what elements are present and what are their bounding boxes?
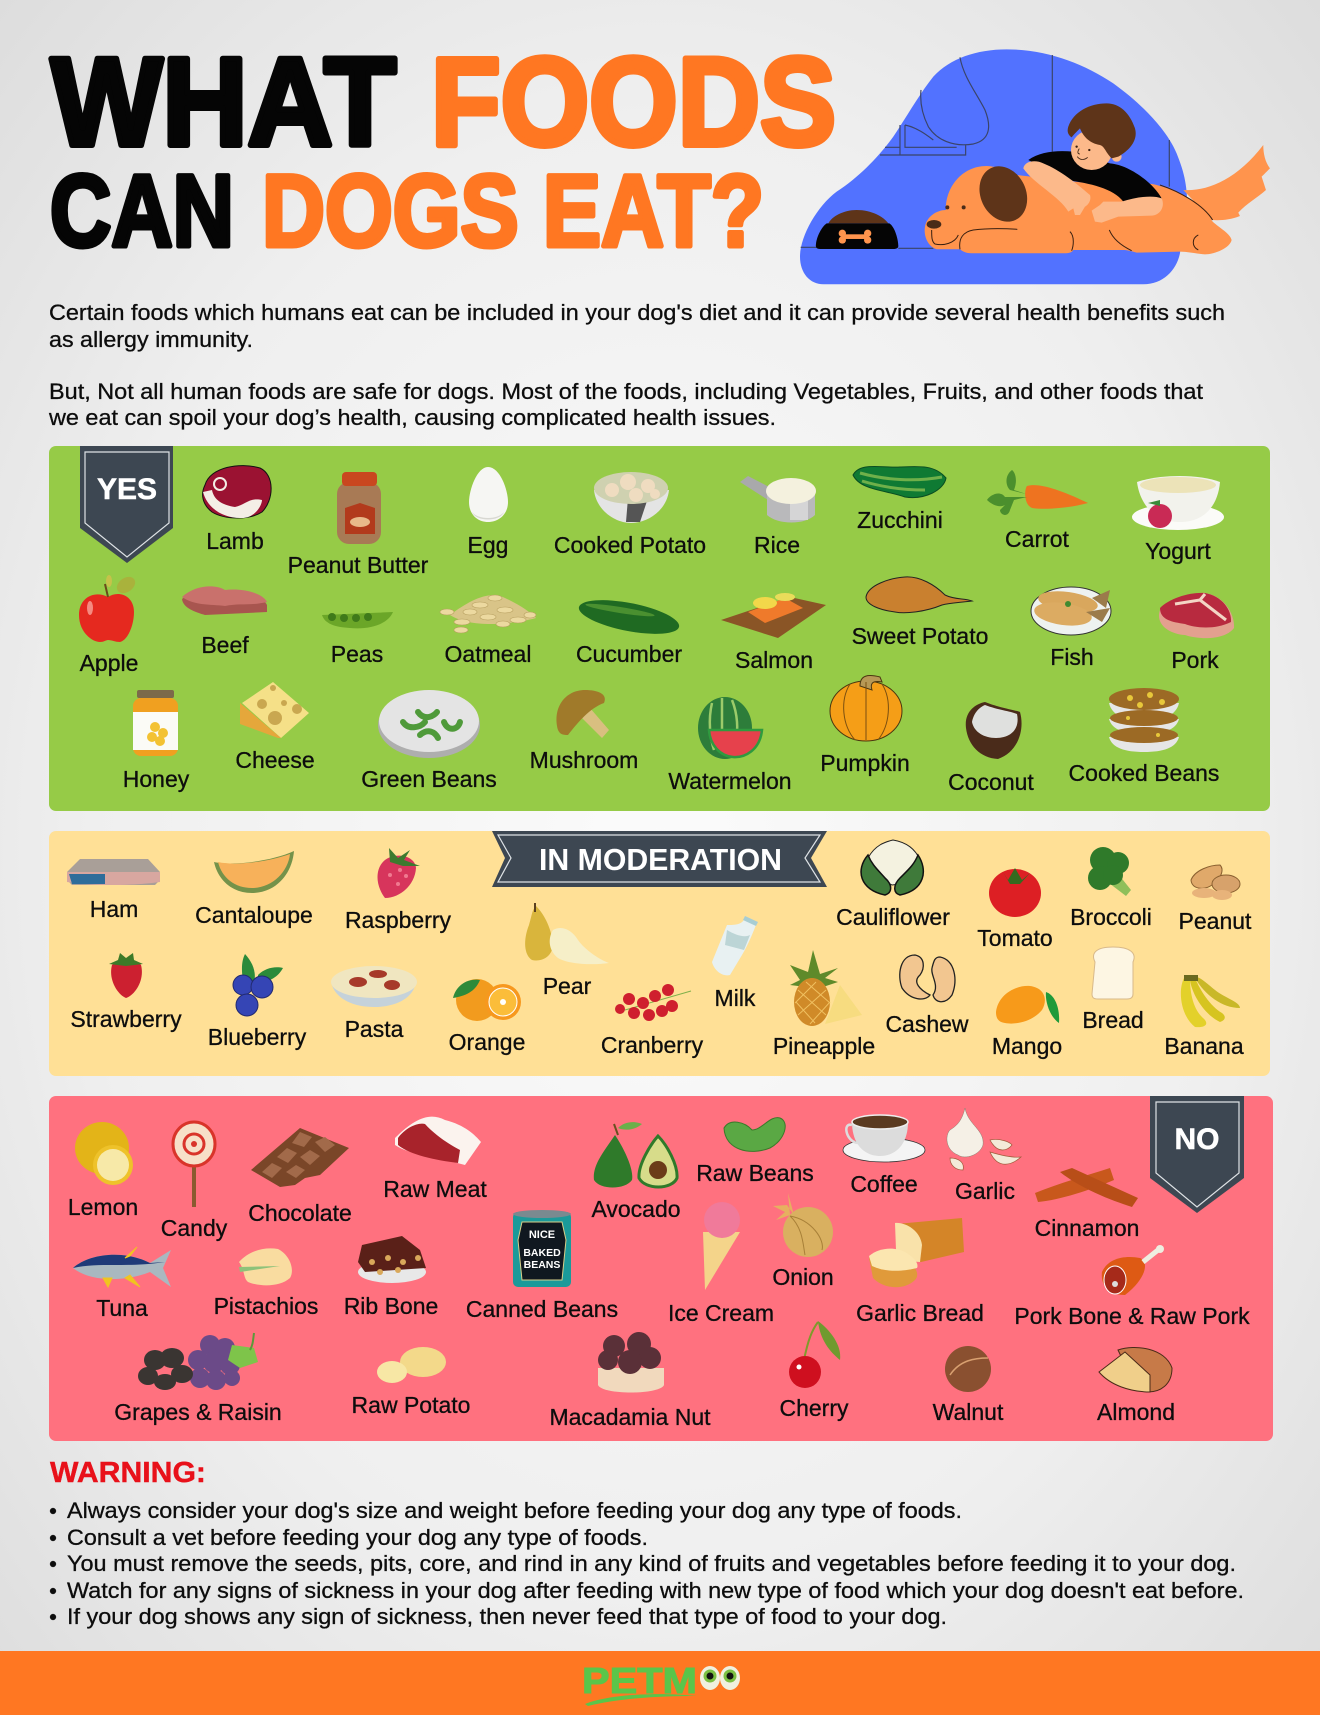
food: green beans: Green Beans — [361, 766, 497, 792]
warning list: You must remove the seeds, pits, core, and rind in any kind of fruits and vegetables before feeding it to your dog. — [67, 1551, 1236, 1576]
title: CAN — [50, 154, 234, 268]
food: raw beans: Raw Beans — [696, 1160, 814, 1186]
food: beef: Beef — [201, 632, 249, 658]
title: DOGS EAT? — [262, 154, 764, 268]
food: cranberry: Cranberry — [601, 1032, 704, 1058]
food: cooked beans: Cooked Beans — [1069, 760, 1219, 786]
food: strawberry: Strawberry — [70, 1006, 182, 1032]
food: honey — [123, 690, 190, 792]
food: walnut — [933, 1346, 1004, 1425]
intro text: Certain foods which humans eat can be included in your dog's diet and it can provide several health benefits such — [49, 300, 1225, 325]
food: oatmeal — [440, 595, 536, 667]
food: avocado — [591, 1122, 681, 1222]
food: cranberry — [601, 984, 704, 1058]
food: pasta: Pasta — [345, 1016, 404, 1042]
food: cooked beans — [1069, 688, 1219, 786]
logo: petmoo — [582, 1660, 740, 1706]
food: bread — [1082, 947, 1144, 1033]
panel: no foods — [49, 1096, 1273, 1441]
food: mango: Mango — [992, 1033, 1062, 1059]
food: banana — [1164, 975, 1244, 1059]
food: beef — [182, 586, 267, 658]
food: pistachios — [214, 1248, 318, 1319]
food: tomato: Tomato — [977, 925, 1053, 951]
food: pineapple — [773, 950, 875, 1059]
food: zucchini — [853, 466, 946, 533]
warning list: If your dog shows any sign of sickness, then never feed that type of food to your dog. — [67, 1604, 947, 1629]
food: lamb — [203, 466, 271, 554]
food: garlic bread — [856, 1218, 984, 1326]
food: cauliflower — [836, 840, 950, 930]
title: FOODS — [431, 33, 836, 172]
food: garlic: Garlic — [955, 1178, 1015, 1204]
intro text: But, Not all human foods are safe for dogs. Most of the foods, including Vegetables, Fruits, and other foods that — [49, 379, 1203, 404]
food: onion: Onion — [772, 1264, 834, 1290]
footer bar — [0, 1651, 1320, 1715]
food: lamb: Lamb — [206, 528, 264, 554]
food: watermelon — [668, 697, 792, 794]
banner: in moderation: IN MODERATION — [539, 842, 782, 877]
warning list: Always consider your dog's size and weight before feeding your dog any type of foods. — [67, 1498, 962, 1523]
food: almond — [1097, 1347, 1175, 1425]
food: peas — [322, 612, 393, 667]
food: milk: Milk — [715, 985, 756, 1011]
food: cucumber — [576, 594, 682, 667]
food: chocolate: Chocolate — [248, 1200, 352, 1226]
intro text — [48, 300, 1225, 430]
food: tomato — [977, 868, 1053, 951]
food: candy: Candy — [161, 1215, 228, 1241]
banner: in moderation — [492, 831, 827, 887]
food: pumpkin: Pumpkin — [820, 750, 910, 776]
food: cherry — [779, 1321, 849, 1421]
food: lemon — [68, 1122, 138, 1220]
food: candy — [161, 1122, 228, 1241]
food: ice cream: Ice Cream — [668, 1300, 774, 1326]
food: coconut: Coconut — [948, 769, 1034, 795]
badge: no: NO — [1174, 1123, 1220, 1156]
food: cheese — [235, 682, 315, 773]
food: orange: Orange — [449, 1029, 525, 1055]
food: watermelon: Watermelon — [668, 768, 792, 794]
food: mango — [992, 986, 1062, 1059]
intro text: we eat can spoil your dog’s health, causing complicated health issues. — [48, 405, 776, 430]
food: pork: Pork — [1171, 647, 1219, 673]
food: pear — [525, 903, 609, 999]
food: salmon: Salmon — [735, 647, 813, 673]
food: cantaloupe — [195, 851, 313, 928]
food: strawberry — [70, 953, 182, 1032]
food: coconut — [948, 702, 1034, 795]
food: cinnamon: Cinnamon — [1035, 1215, 1139, 1241]
food: cheese: Cheese — [235, 747, 315, 773]
food: sweet potato — [852, 577, 988, 649]
badge: no — [1150, 1096, 1244, 1213]
food: rice — [740, 476, 816, 558]
intro text: as allergy immunity. — [49, 327, 253, 352]
food: peanut butter — [288, 472, 429, 578]
logo: petmoo: PETM — [582, 1660, 697, 1701]
food: coffee — [843, 1115, 925, 1197]
food: honey: Honey — [123, 766, 190, 792]
food: cucumber: Cucumber — [576, 641, 682, 667]
food: avocado: Avocado — [591, 1196, 681, 1222]
food: fish: Fish — [1050, 644, 1094, 670]
food: canned beans: BAKED — [523, 1247, 561, 1259]
food: blueberry: Blueberry — [208, 1024, 307, 1050]
food: chocolate — [248, 1128, 352, 1226]
food: cantaloupe: Cantaloupe — [195, 902, 313, 928]
food: peanut: Peanut — [1179, 908, 1252, 934]
food: cashew — [885, 955, 969, 1037]
food: pork bone and raw pork: Pork Bone & Raw Pork — [1014, 1303, 1250, 1329]
food: walnut: Walnut — [933, 1399, 1004, 1425]
food: cauliflower: Cauliflower — [836, 904, 950, 930]
food: orange — [449, 979, 525, 1055]
food: yogurt — [1132, 476, 1224, 564]
food: peas: Peas — [331, 641, 383, 667]
food: canned beans — [466, 1210, 618, 1322]
food: canned beans: BEANS — [524, 1259, 560, 1271]
food: macadamia nut: Macadamia Nut — [549, 1404, 711, 1430]
food: ham — [67, 859, 160, 922]
warning list: Watch for any signs of sickness in your dog after feeding with new type of food which your dog doesn't eat before. — [67, 1578, 1244, 1603]
food: tuna: Tuna — [96, 1295, 148, 1321]
food: raspberry — [345, 848, 452, 933]
food: cherry: Cherry — [779, 1395, 849, 1421]
food: salmon — [721, 593, 826, 673]
food: apple: Apple — [80, 650, 138, 676]
food: grapes and raisin — [114, 1333, 282, 1425]
food: banana: Banana — [1164, 1033, 1244, 1059]
food: rice: Rice — [754, 532, 800, 558]
food: pumpkin — [820, 676, 910, 776]
food: grapes and raisin: Grapes & Raisin — [114, 1399, 282, 1425]
food: raw potato: Raw Potato — [352, 1392, 470, 1418]
food: green beans — [361, 690, 497, 792]
food: garlic bread: Garlic Bread — [856, 1300, 984, 1326]
food: raw potato — [352, 1347, 470, 1418]
food: raw meat — [383, 1117, 487, 1202]
illustration: dog with owner and bowl — [800, 49, 1270, 284]
food: rib bone — [344, 1236, 438, 1319]
panel: yes foods — [49, 446, 1270, 811]
food: carrot: Carrot — [1005, 526, 1070, 552]
food: pistachios: Pistachios — [214, 1293, 318, 1319]
food: cooked potato — [554, 472, 706, 558]
food: oatmeal: Oatmeal — [445, 641, 531, 667]
food: apple — [79, 574, 138, 676]
food: blueberry — [208, 954, 307, 1050]
food: canned beans: Canned Beans — [466, 1296, 618, 1322]
food: pork bone and raw pork — [1014, 1245, 1250, 1329]
food: macadamia nut — [549, 1332, 711, 1430]
food: ham: Ham — [90, 896, 138, 922]
food: pasta — [331, 966, 417, 1042]
food: egg — [468, 467, 508, 558]
food: yogurt: Yogurt — [1145, 538, 1211, 564]
food: milk — [712, 916, 758, 1011]
food: rib bone: Rib Bone — [344, 1293, 438, 1319]
food: coffee: Coffee — [850, 1171, 918, 1197]
food: cinnamon — [1035, 1168, 1139, 1241]
food: cashew: Cashew — [885, 1011, 969, 1037]
food: zucchini: Zucchini — [857, 507, 943, 533]
food: onion — [772, 1193, 834, 1290]
title — [50, 33, 836, 268]
food: lemon: Lemon — [68, 1194, 138, 1220]
food: egg: Egg — [468, 532, 508, 558]
badge: yes — [80, 446, 173, 563]
food: mushroom — [530, 690, 638, 773]
food: carrot — [987, 470, 1088, 552]
food: pear: Pear — [543, 973, 592, 999]
food: raspberry: Raspberry — [345, 907, 452, 933]
warning list: Consult a vet before feeding your dog any type of foods. — [67, 1525, 648, 1550]
food: canned beans: NICE — [529, 1229, 555, 1241]
food: peanut — [1179, 865, 1252, 934]
food: garlic — [947, 1108, 1021, 1204]
food: raw beans — [696, 1118, 814, 1186]
food: raw meat: Raw Meat — [383, 1176, 487, 1202]
food: pineapple: Pineapple — [773, 1033, 875, 1059]
food: tuna — [73, 1247, 171, 1321]
badge: yes: YES — [97, 473, 157, 506]
title: WHAT — [51, 33, 396, 172]
food: ice cream — [668, 1202, 774, 1326]
food: bread: Bread — [1082, 1007, 1144, 1033]
panel: in moderation foods — [49, 831, 1270, 1076]
food: almond: Almond — [1097, 1399, 1175, 1425]
food: peanut butter: Peanut Butter — [288, 552, 429, 578]
food: cooked potato: Cooked Potato — [554, 532, 706, 558]
food: pork — [1159, 593, 1234, 673]
food: sweet potato: Sweet Potato — [852, 623, 988, 649]
warning list — [50, 1498, 1244, 1629]
food: broccoli — [1070, 847, 1152, 930]
warning heading: WARNING: — [50, 1457, 206, 1489]
food: mushroom: Mushroom — [530, 747, 638, 773]
food: broccoli: Broccoli — [1070, 904, 1152, 930]
food: fish — [1031, 587, 1111, 670]
